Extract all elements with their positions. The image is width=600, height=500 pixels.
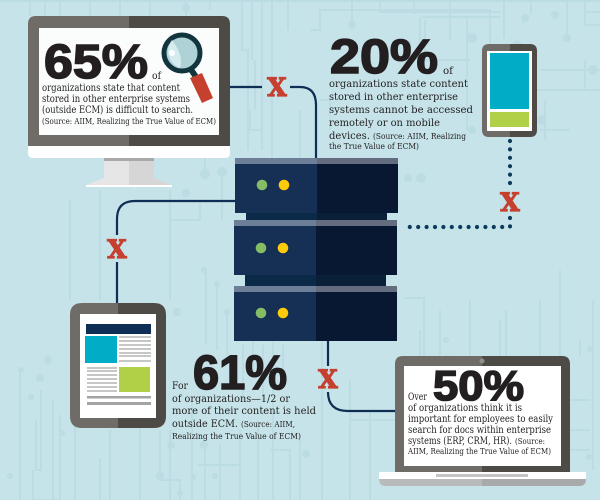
icon: laptop [379,356,586,486]
text: 65 percent stat: stored in other enterprise systems [42,94,190,105]
text: 50 percent stat: important for employees to easily [408,414,553,425]
text: 65 percent stat: (Source: AIIM, Realizing the True Value of ECM) [42,117,216,126]
text: 61 percent stat: (Source: AIIM, [241,420,295,429]
text: 50 percent stat: 50% [433,362,524,409]
text: 65 percent stat: (outside ECM) is difficult to search. [42,105,193,116]
connector: server to tablet [117,201,235,303]
text: 65 percent stat: organizations state that content [42,83,180,94]
text: 20 percent stat: the True Value of ECM) [329,142,419,151]
text: 50 percent stat: of organizations think it is [408,403,522,414]
text: 61 percent stat: more of their content is held [172,406,317,417]
text: 20 percent stat [329,31,474,151]
text: 50 percent stat: AIIM, Realizing the True Value of ECM) [407,447,551,456]
text: 65 percent stat [42,36,216,126]
X mark: phone link: X [500,188,520,217]
X mark: laptop link: X [318,365,338,394]
connector: monitor to server [230,87,316,158]
X mark: monitor link: X [267,73,287,102]
text: 20 percent stat: stored in other enterprise [329,92,458,103]
text: 50 percent stat: Over [408,392,427,403]
icon: desktop monitor [28,16,230,187]
text: 61 percent stat: outside ECM. [172,419,238,430]
X mark: tablet link: X [107,235,127,264]
text: 20 percent stat: (Source: AIIM, Realizing [373,132,466,141]
text: 65 percent stat: 65% [44,36,148,89]
text: 50 percent stat: search for docs within enterprise [408,425,551,436]
text: 20 percent stat: remotely or on mobile [329,118,440,129]
text: 61 percent stat: 61% [193,347,287,400]
text: 20 percent stat: of [443,66,454,77]
icon: magnifying glass [164,35,213,103]
connector: dotted server to phone [408,141,510,227]
text: 20 percent stat: 20% [330,31,438,84]
connector: server to laptop [328,341,395,411]
text: 20 percent stat: devices. [329,131,370,142]
icon: server stack [234,158,398,341]
text: 20 percent stat: systems cannot be accessed [329,105,474,116]
text: 61 percent stat: Realizing the True Value of ECM) [172,432,301,441]
text: 20 percent stat: organizations state content [329,79,468,90]
text: 61 percent stat: For [172,381,188,392]
text: 61 percent stat: of organizations—1/2 or [172,394,290,405]
text: 50 percent stat [407,362,553,456]
text: 50 percent stat: (Source: [515,437,545,446]
icon: tablet with document [70,303,166,428]
text: 65 percent stat: of [152,71,162,82]
text: 50 percent stat: systems (ERP, CRM, HR). [408,436,512,447]
icon: smartphone [482,44,537,137]
text: 61 percent stat [172,347,317,441]
